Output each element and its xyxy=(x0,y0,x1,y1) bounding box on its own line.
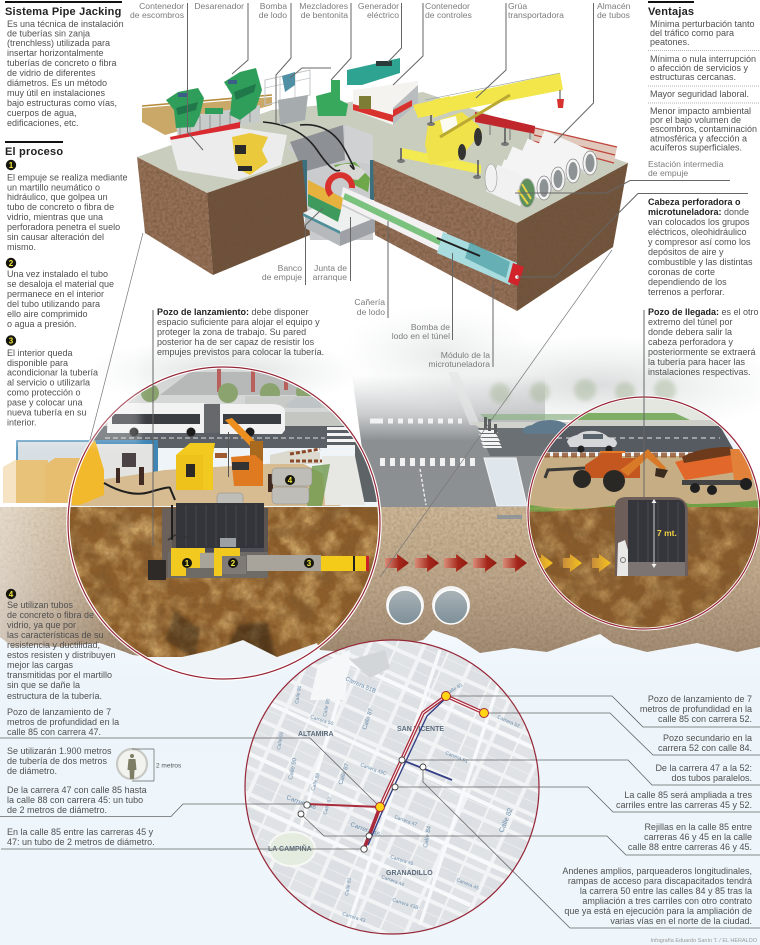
callout: cabeza perforadora: Cabeza perforadora o xyxy=(648,197,741,207)
circle number badges: 3 xyxy=(307,559,312,568)
map notes: right xyxy=(562,694,752,926)
label: almacén de tubos: de tubos xyxy=(597,10,630,20)
heading: Sistema Pipe Jacking xyxy=(5,6,122,18)
jacking bank and thrust ring xyxy=(308,162,370,222)
street labels: Calle 87 xyxy=(322,796,334,816)
stacked concrete pipes xyxy=(217,468,312,507)
step 4 number xyxy=(6,589,16,599)
step 4 text: sin que se dañe la xyxy=(7,680,80,690)
label: módulo de la microtuneladora: microtuneladora xyxy=(428,359,490,369)
label: módulo de la microtuneladora: Módulo de la xyxy=(441,350,490,360)
step 1 text: perforadora penetra el suelo xyxy=(7,222,120,232)
label: contenedor de escombros: Contenedor xyxy=(139,1,184,11)
street labels: Carrera 51B xyxy=(344,676,376,695)
street labels xyxy=(276,676,521,924)
white fog over upper scene xyxy=(0,330,140,505)
street labels: Carrera 44 xyxy=(380,874,405,888)
street labels: Calle 91 xyxy=(294,685,303,704)
left block soil faces xyxy=(137,157,310,275)
label: mezcladores de bentonita: de bentonita xyxy=(301,10,348,20)
callout: cabeza perforadora: donde xyxy=(722,207,749,217)
intro text: diámetros. Es un método xyxy=(7,78,107,88)
label: bomba de lodo en el túnel: lodo en el túnel xyxy=(392,331,450,341)
callout: pozo de llegada: Pozo de llegada: xyxy=(648,307,719,317)
note: pozo de lanzamiento carrera 47: metros de profundidad en la xyxy=(7,717,119,727)
step 3 text: al servicio o utilizarla xyxy=(7,378,90,388)
circle number badges: 4 xyxy=(288,476,293,485)
street labels: Carrera 51 xyxy=(444,750,469,765)
step 1 text: hidráulico, que golpea un xyxy=(7,192,108,202)
red pipe rack xyxy=(475,112,535,142)
step 1 text: El empuje se realiza mediante xyxy=(7,172,128,182)
label: bomba de lodo: de lodo xyxy=(259,10,287,20)
intro text: de tuberías sin zanja xyxy=(7,28,90,38)
callout: cabeza perforadora: y compresor así como los xyxy=(648,237,751,247)
note: rejillas: carreras 46 y 45 en la calle xyxy=(644,832,752,842)
island walkway xyxy=(322,456,365,505)
note: calle 85 entre carreras: En la calle 85 entre las carreras 45 y xyxy=(7,827,154,837)
intro text: edificaciones, etc. xyxy=(7,118,79,128)
advantage 2: Mínima o nula interrupción xyxy=(650,54,756,64)
step 3 number: 3 xyxy=(9,336,14,346)
jacking machine and pipe xyxy=(168,548,369,578)
launch pit xyxy=(148,503,268,580)
label: cañería de lodo: Cañería xyxy=(354,297,385,307)
dump truck xyxy=(675,447,752,495)
label: generador eléctrico: Generador xyxy=(358,1,399,11)
step 2 text: permanece en el interior xyxy=(7,289,104,299)
label: bomba de lodo en el túnel: Bomba de xyxy=(411,322,450,332)
step 2 text: Una vez instalado el tubo xyxy=(7,269,108,279)
articulated bus xyxy=(107,396,322,436)
depth label: 7 mt. xyxy=(657,528,677,538)
step 1 text: vidrio, mientras que una xyxy=(7,212,103,222)
advantage 4: atmosférica y afección a xyxy=(650,134,747,144)
label: contenedor de controles: de controles xyxy=(425,10,472,20)
step 4 text: estructura de la tubería. xyxy=(7,691,102,701)
intro text: insertar horizontalmente xyxy=(7,48,104,58)
fog behind street xyxy=(85,305,760,435)
car: blue sedan xyxy=(522,420,568,434)
icon: person in 2 m pipe: 2 metros xyxy=(156,762,182,770)
advantage 2: estructuras cercanas. xyxy=(650,72,736,82)
neighbourhood labels: SAN VICENTE xyxy=(397,726,444,733)
heading: Ventajas xyxy=(648,6,694,18)
callout: pozo de llegada: extremo del túnel por xyxy=(648,317,733,327)
step 1 text: un martillo neumático o xyxy=(7,182,100,192)
callout: pozo de lanzamiento: espacio suficiente para alojar el equipo y xyxy=(157,317,320,327)
circle number badges: 2 xyxy=(231,559,236,568)
bentonite mixers xyxy=(316,80,348,116)
step 1 text: tubo de concreto o fibra de xyxy=(7,202,114,212)
step 4 text: las características de su xyxy=(7,630,104,640)
crane xyxy=(397,73,564,179)
step 3 text: pase y colocar una xyxy=(7,398,83,408)
step 4 text: vidrio, ya que por xyxy=(7,620,76,630)
left prefab containers xyxy=(3,441,117,503)
callout: pozo de lanzamiento: proteger la zona de trabajo. Su pared xyxy=(157,327,306,337)
main avenues xyxy=(246,650,534,927)
note: ampliación: carriles entre las carreras 45 y 52. xyxy=(616,800,752,810)
intro text: (trenchless) utilizada para xyxy=(7,38,110,48)
label: bomba de lodo: Bomba xyxy=(260,1,287,11)
callout: pozo de llegada: posteriormente se extraerá xyxy=(648,347,756,357)
intro panel: Sistema Pipe Jacking xyxy=(5,1,124,128)
note: calle 85 entre carreras: 47: un tubo de 2 metros de diámetro. xyxy=(7,837,155,847)
step 2 number xyxy=(6,258,16,268)
soil xyxy=(530,507,758,628)
circle outline: launch xyxy=(68,367,380,679)
step 3 text: El interior queda xyxy=(7,348,73,358)
callout: cabeza perforadora: dependiendo de los xyxy=(648,277,727,287)
note: carrera 47 a calle 88: de 2 metros de diámetro. xyxy=(7,805,107,815)
street labels: Carrera 43 xyxy=(341,911,366,924)
label: contenedor de controles: Contenedor xyxy=(425,1,470,11)
white plot and gray block xyxy=(310,650,350,700)
green desanders xyxy=(166,68,262,128)
note: andenes: ampliación a tres carriles con otro contrato xyxy=(582,896,752,906)
neighbourhood labels: LA CAMPIÑA xyxy=(268,844,312,853)
hoses xyxy=(104,483,175,500)
note: andenes: Andenes amplios, parqueaderos longitudinales, xyxy=(562,866,752,876)
credit: Infografía Eduardo Sanín T. / EL HERALDO xyxy=(651,938,758,944)
ground outside circles xyxy=(0,505,760,660)
label: grúa transportadora: transportadora xyxy=(508,10,564,20)
label: contenedor de escombros: de escombros xyxy=(130,10,184,20)
arrow tips inside circle xyxy=(534,554,611,572)
street labels: Carrera 47 xyxy=(393,814,418,828)
note: rejillas: Rejillas en la calle 85 entre xyxy=(644,822,752,832)
label: banco de empuje: Banco xyxy=(278,263,302,273)
note: rejillas: calle 88 entre carreras 46 y 45. xyxy=(628,842,752,852)
street labels: Carrera 46 xyxy=(349,821,381,839)
advantage 4: acuíferos superficiales. xyxy=(650,142,742,152)
stored concrete tubes xyxy=(485,141,597,208)
step 1 number xyxy=(6,160,16,170)
step 4 number: 4 xyxy=(9,590,14,599)
pit interior xyxy=(287,125,374,240)
tunnel pipe xyxy=(340,187,524,286)
work yard xyxy=(70,464,341,506)
control container xyxy=(353,81,418,125)
note: 1.900 metros: de tubería de dos metros xyxy=(7,756,108,766)
street map xyxy=(0,640,760,935)
step 3 text: disponible para xyxy=(7,358,68,368)
panel: Ventajas xyxy=(648,1,760,152)
desander platform xyxy=(142,68,272,145)
intro text: bajo estructuras como vías, xyxy=(7,98,117,108)
circle outline: arrival xyxy=(528,397,760,629)
step 2 text: del tubo utilizando para xyxy=(7,299,100,309)
street labels: Carrera 45 xyxy=(389,854,414,867)
street labels: Calle 85 xyxy=(445,682,464,697)
street labels: Calle 82 xyxy=(498,807,515,834)
step 2 number: 2 xyxy=(9,259,14,268)
right block soil faces xyxy=(370,160,632,315)
step 4 text: transmitidas por el martillo xyxy=(7,670,112,680)
step 3 text: interior. xyxy=(7,418,37,428)
note: andenes: rampas de acceso para discapacitados tendrá xyxy=(568,876,752,886)
label: desarenador: Desarenador xyxy=(194,1,244,11)
step 4 text: de concreto o fibra de xyxy=(7,610,94,620)
intro text: muy útil en instalaciones xyxy=(7,88,106,98)
map leader lines xyxy=(0,696,760,928)
note: dos tubos paralelos: De la carrera 47 a la 52: xyxy=(655,763,752,773)
debris container xyxy=(170,128,287,180)
step 2 text: o agua a presión. xyxy=(7,319,77,329)
background plaza xyxy=(104,368,344,426)
callout: cabeza perforadora: microtuneladora: xyxy=(648,207,722,217)
street labels: Calle 81 xyxy=(344,877,353,896)
note: andenes: que ya está en ejecución para la ampliación de xyxy=(564,906,752,916)
step 1 text: mismo. xyxy=(7,242,36,252)
intro text: tuberías de concreto o fibra xyxy=(7,58,117,68)
street labels: Carrera 50 xyxy=(309,714,334,727)
advantage 1: peatones. xyxy=(650,37,690,47)
pit floor slab xyxy=(303,200,375,246)
label: generador eléctrico: eléctrico xyxy=(367,10,399,20)
note: carrera 47 a calle 88: la calle 88 con carrera 45: un tubo xyxy=(7,795,143,805)
callout: cabeza perforadora: combustible y las distintas xyxy=(648,257,753,267)
callout: cabeza perforadora: eléctricos, oleohidráulico xyxy=(648,227,747,237)
office cabin xyxy=(92,440,158,480)
neighbourhood labels: ALTAMIRA xyxy=(298,731,334,738)
advantage 4: Menor impacto ambiental xyxy=(650,106,751,116)
road xyxy=(547,426,734,452)
street labels: Calle 88 xyxy=(310,772,322,792)
callout: pozo de llegada: instalaciones respectivas. xyxy=(648,367,751,377)
note: pozo de lanzamiento carrera 47: calle 85 con carrera 47. xyxy=(7,727,101,737)
note: 1.900 metros: de diámetro. xyxy=(7,766,57,776)
note: 1.900 metros: Se utilizarán 1.900 metros xyxy=(7,746,112,756)
soil inside circle xyxy=(70,507,378,657)
note: pozo secundario: carrera 52 con calle 84. xyxy=(658,743,752,753)
neighbourhood labels: GRANADILLO xyxy=(386,870,433,877)
label: cañería de lodo: de lodo xyxy=(357,307,385,317)
callout: cabeza perforadora: coronas de corte xyxy=(648,267,715,277)
advantage 4: escombros, contaminación xyxy=(650,124,757,134)
map routes xyxy=(307,696,484,849)
label: almacén de tubos: Almacén xyxy=(597,1,631,11)
callout: pozo de lanzamiento: posterior ha de ser capaz de resistir los xyxy=(157,337,315,347)
street labels: Calle 91 xyxy=(276,731,285,750)
tube bundle xyxy=(533,128,617,163)
street labels: Carrera 52 xyxy=(496,714,521,730)
step 2 text: ello aire comprimido xyxy=(7,309,88,319)
note: pozo de lanzamiento carrera 47: Pozo de lanzamiento de 7 xyxy=(7,707,111,717)
top callout leader lines xyxy=(90,3,748,577)
label: grúa transportadora: Grúa xyxy=(508,1,527,11)
circle: launch shaft xyxy=(66,365,382,681)
callout: pozo de llegada: la tubería para hacer las xyxy=(648,357,746,367)
step 3 number xyxy=(6,335,16,346)
street labels: Carrera 43B xyxy=(391,897,420,912)
panel: El proceso xyxy=(5,141,128,701)
step 4 text: estos resisten y distribuyen xyxy=(7,650,116,660)
direction arrows xyxy=(385,554,527,572)
street labels: Calle 87 xyxy=(338,762,351,786)
callout: pozo de llegada: donde debera salir la xyxy=(648,327,732,337)
trees in fog xyxy=(490,379,676,403)
label: estación intermedia: de empuje xyxy=(648,168,688,178)
advantage 3: Mayor seguridad laboral. xyxy=(650,89,749,99)
advantage 4: por el bajo volumen de xyxy=(650,115,741,125)
note: andenes: la carrera 50 entre las calles 84 y 85 tras la xyxy=(580,886,752,896)
callout: pozo de llegada: es el otro xyxy=(719,307,759,317)
callout: cabeza perforadora: van colocados los grupos xyxy=(648,217,750,227)
note: pozo carrera 52: metros de profundidad en la xyxy=(640,704,752,714)
yard ground xyxy=(525,455,760,515)
step 4 text: resistencia y ductilidad, xyxy=(7,640,100,650)
label: banco de empuje: de empuje xyxy=(262,272,302,282)
step 1 text: sin causar alteración del xyxy=(7,232,104,242)
ground mark xyxy=(497,515,522,519)
workers xyxy=(116,467,273,492)
intro text: cuerpos de agua, xyxy=(7,108,77,118)
park: La Campiña xyxy=(269,832,315,866)
street labels: Carrera 46 xyxy=(285,794,317,812)
intro text: Es una técnica de instalación xyxy=(7,19,124,29)
road xyxy=(94,426,377,502)
orange truck crane xyxy=(225,418,263,486)
silver car xyxy=(567,431,617,452)
3D cutaway: pipe jacking site xyxy=(130,58,632,315)
callout labels: site equipment xyxy=(130,1,724,369)
street labels: Calle 87 xyxy=(362,707,375,731)
intro text: de vidrio de diferentes xyxy=(7,68,96,78)
label: mezcladores de bentonita: Mezcladores xyxy=(299,1,348,11)
label: junta de arranque: arranque xyxy=(313,272,347,282)
callout: cabeza perforadora: depósitos de aire y xyxy=(648,247,724,257)
mud pump tower xyxy=(265,70,310,125)
callout: pozo de lanzamiento: debe disponer xyxy=(249,307,309,317)
arrival pit xyxy=(615,497,688,576)
callout: cabeza perforadora: terrenos a perforar. xyxy=(648,287,725,297)
concrete pipes cross-section xyxy=(386,586,470,624)
note: pozo secundario: Pozo secundario en la xyxy=(663,733,752,743)
circle number badges: 1 xyxy=(185,559,190,568)
advantage 2: o afección de servicios y xyxy=(650,63,749,73)
step 4 text: Se utilizan tubos xyxy=(7,600,74,610)
street labels: Carrera 45 xyxy=(455,877,480,892)
neighbourhood labels xyxy=(268,726,444,877)
mini excavator xyxy=(232,133,268,175)
note: carrera 47 a calle 88: De la carrera 47 con calle 85 hasta xyxy=(7,785,147,795)
step 4 text: mejor las cargas xyxy=(7,660,74,670)
street labels: Calle 90 xyxy=(322,698,332,717)
yellow containers xyxy=(60,440,215,505)
map notes: left xyxy=(7,707,182,847)
label: estación intermedia: Estación intermedia xyxy=(648,159,724,169)
step 2 text: se desaloja el material que xyxy=(7,279,114,289)
callout: pozo de llegada: cabeza perforadora y xyxy=(648,337,734,347)
icon: person in 2 m pipe xyxy=(117,749,182,781)
map circle outline xyxy=(245,640,539,934)
backhoe tractor xyxy=(545,449,668,492)
label: junta de arranque: Junta de xyxy=(314,263,347,273)
circle number badges xyxy=(182,475,314,568)
note: ampliación: La calle 85 será ampliada a tres xyxy=(624,790,752,800)
advantage 1: Mínima perturbación tanto xyxy=(650,19,755,29)
note: pozo carrera 52: Pozo de lanzamiento de 7 xyxy=(648,694,752,704)
note: andenes: varias vías en el norte de la ciudad. xyxy=(610,916,752,926)
street labels: Calle 84 xyxy=(423,825,433,848)
street labels: Calle 90 xyxy=(288,757,299,780)
black hoses xyxy=(263,122,354,171)
callout: pozo de lanzamiento: empujes previstos para colocar la tubería. xyxy=(157,347,324,357)
note: pozo carrera 52: calle 85 con carrera 52. xyxy=(658,714,752,724)
advantage 1: del tráfico como para xyxy=(650,28,734,38)
step 3 text: como protección o xyxy=(7,388,81,398)
street outside circles xyxy=(352,372,700,507)
generator xyxy=(347,58,400,85)
barriers xyxy=(270,450,320,464)
pedestrians xyxy=(484,417,497,433)
step 3 text: acondicionar la tubería xyxy=(7,368,98,378)
map nodes xyxy=(298,692,488,852)
note: dos tubos paralelos: dos tubos paralelos. xyxy=(671,773,752,783)
outrigger feet xyxy=(397,122,509,179)
circle: arrival shaft xyxy=(525,395,760,640)
step 1 number: 1 xyxy=(9,161,14,170)
callout: pozo de lanzamiento: Pozo de lanzamiento: xyxy=(157,307,249,317)
ground top xyxy=(137,92,628,223)
heading: El proceso xyxy=(5,146,63,158)
far side green strip xyxy=(588,398,710,420)
lower street and soil scene xyxy=(0,305,760,660)
step 3 text: nueva tubería en su xyxy=(7,408,87,418)
street labels: Carrera 49C xyxy=(359,762,388,777)
